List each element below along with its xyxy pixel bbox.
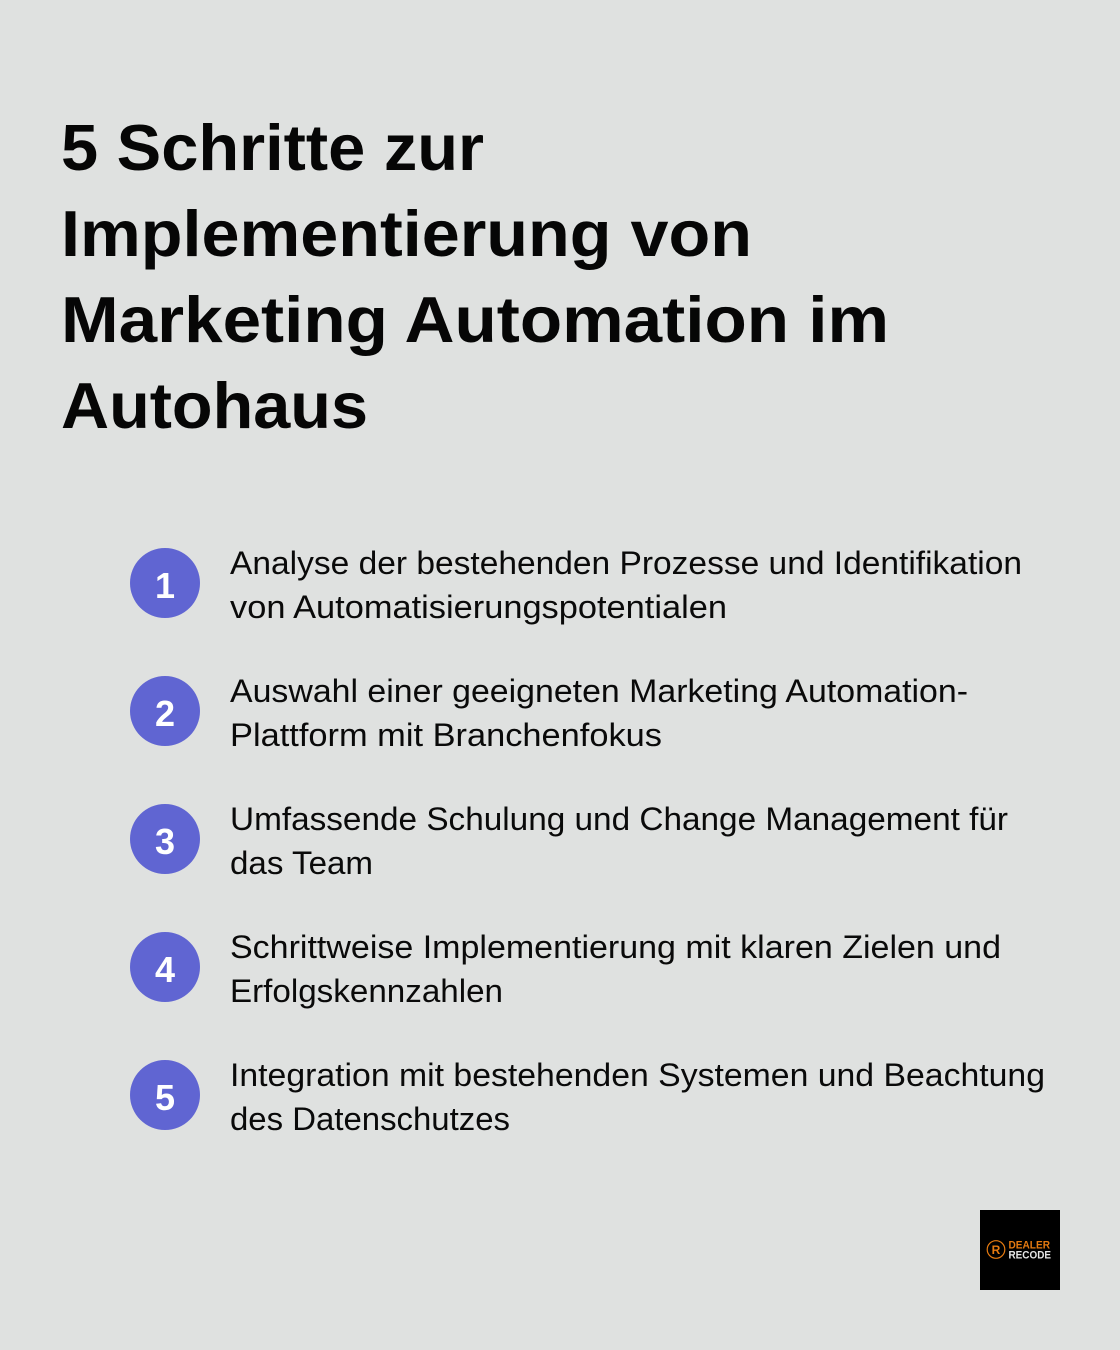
title: 5 Schritte zur xyxy=(61,111,484,184)
step 3 text xyxy=(230,801,1008,881)
step 4 text: Schrittweise Implementierung mit klaren Zielen und xyxy=(230,929,1001,965)
number badge 2 xyxy=(130,676,200,746)
number badge 3 xyxy=(130,804,200,874)
logo: Dealer Recode: DEALER xyxy=(1008,1240,1050,1252)
number badge 1: 1 xyxy=(155,565,175,606)
number badge 1 xyxy=(130,548,200,618)
step 3 text: das Team xyxy=(230,845,373,881)
step 4 text: Erfolgskennzahlen xyxy=(230,973,503,1009)
step 3 xyxy=(130,801,1008,881)
logo: Dealer Recode xyxy=(980,1210,1060,1290)
logo: Dealer Recode: RECODE xyxy=(1008,1250,1051,1262)
step 1 xyxy=(130,545,1022,625)
title: Marketing Automation im xyxy=(61,283,889,356)
step 2 text: Auswahl einer geeigneten Marketing Automation- xyxy=(230,673,968,709)
title: Autohaus xyxy=(61,369,368,442)
step 2 text xyxy=(230,673,968,753)
step 4 text xyxy=(230,929,1001,1009)
step 2 text: Plattform mit Branchenfokus xyxy=(230,717,662,753)
step 3 text: Umfassende Schulung und Change Management für xyxy=(230,801,1008,837)
step 1 text: von Automatisierungspotentialen xyxy=(230,589,727,625)
number badge 5: 5 xyxy=(155,1077,175,1118)
number badge 3: 3 xyxy=(155,821,175,862)
step 5 text: Integration mit bestehenden Systemen und Beachtung xyxy=(230,1057,1045,1093)
number badge 4 xyxy=(130,932,200,1002)
step 5 xyxy=(130,1057,1045,1137)
logo: Dealer Recode: R xyxy=(992,1243,1001,1257)
step 1 text xyxy=(230,545,1022,625)
number badge 4: 4 xyxy=(155,949,175,990)
step 4 xyxy=(130,929,1001,1009)
step 1 text: Analyse der bestehenden Prozesse und Identifikation xyxy=(230,545,1022,581)
number badge 2: 2 xyxy=(155,693,175,734)
step 5 text: des Datenschutzes xyxy=(230,1101,510,1137)
title: Implementierung von xyxy=(61,197,752,270)
number badge 5 xyxy=(130,1060,200,1130)
title xyxy=(61,111,889,442)
step 5 text xyxy=(230,1057,1045,1137)
step 2 xyxy=(130,673,968,753)
